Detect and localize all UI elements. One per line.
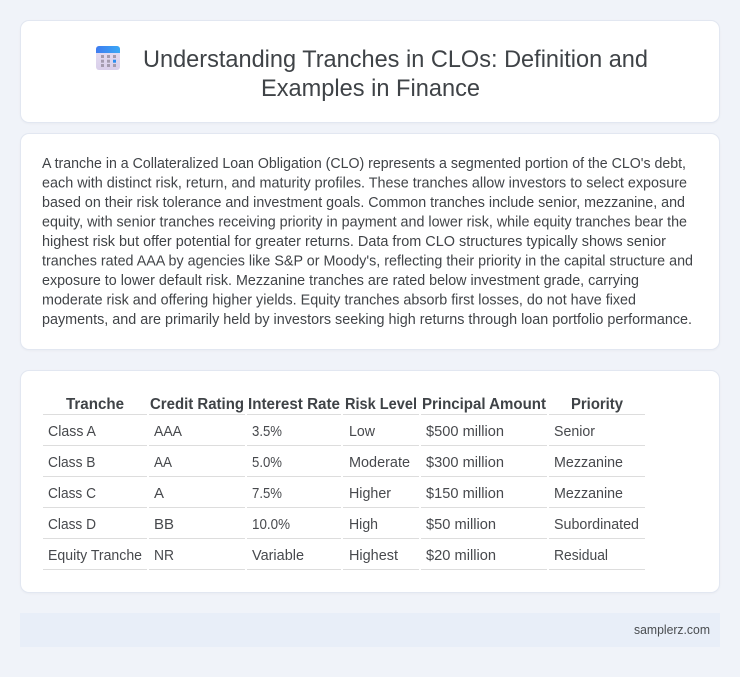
row: Class A (48, 424, 595, 440)
row: Class B: Mezzanine (554, 455, 623, 471)
row: Class A: $500 million (426, 424, 504, 440)
row: Class B: 5.0% (252, 455, 282, 471)
text block: description: payments, and are primarily held by investors seeking high returns through loan portfolio performance. (42, 312, 692, 328)
text block: description: based on their risk tolerance and investment goals. Common tranches include senior, mezzanine, and (42, 195, 685, 211)
row: Class C: 7.5% (252, 486, 282, 502)
row: Class B: Class B (48, 455, 96, 471)
table header: Credit Rating (150, 396, 244, 413)
table header: Tranche (66, 396, 124, 413)
row: Class B: Moderate (349, 455, 410, 471)
row: Class A: AAA (154, 424, 182, 440)
row: Class B: $300 million (426, 455, 504, 471)
text block: description: A tranche in a Collateralized Loan Obligation (CLO) represents a segmented portion of the CLO's debt, (42, 156, 686, 172)
text block: description: each with distinct risk, return, and maturity profiles. These tranches allow investors to select exposure (42, 176, 687, 192)
row: Class A: Class A (48, 424, 96, 440)
row: Equity Tranche: NR (154, 548, 174, 564)
title: Examples in Finance (261, 75, 480, 102)
row: Class A: 3.5% (252, 424, 282, 440)
text block: description: exposure to lower default risk. Mezzanine tranches are rated below investment grade, carrying (42, 273, 639, 289)
row: Equity Tranche: Residual (554, 548, 608, 564)
row: Equity Tranche: Highest (349, 548, 398, 564)
table header: Priority (571, 396, 623, 413)
table (43, 396, 645, 570)
row: Class C: Class C (48, 486, 96, 502)
row: Equity Tranche (48, 548, 608, 564)
panel: title card (20, 20, 720, 123)
footer text: samplerz.com (634, 623, 710, 637)
row: Class D: $50 million (426, 517, 496, 533)
table header: Principal Amount (422, 396, 547, 413)
text block: description: moderate risk and offering higher yields. Equity tranches absorb first losses, do not have fixed (42, 292, 636, 308)
panel: table card (20, 370, 720, 593)
row: Class C (48, 486, 623, 502)
row: Class B: AA (154, 455, 172, 471)
row: Class D: 10.0% (252, 517, 290, 533)
row: Class D (48, 517, 639, 533)
text block: description: equity, with senior tranches receiving priority in payment and lower risk, while equity tranches bear the (42, 214, 687, 230)
icon: calendar (96, 46, 120, 70)
row: Class D: Class D (48, 517, 96, 533)
title: Understanding Tranches in CLOs: Definition and (143, 46, 648, 73)
row: Class D: Subordinated (554, 517, 639, 533)
row: Equity Tranche: $20 million (426, 548, 496, 564)
footer bar (20, 613, 720, 647)
table header: Interest Rate (248, 396, 340, 413)
text block: description: tranches rated AAA by agencies like S&P or Moody's, reflecting their priority in the capital structure and (42, 254, 693, 270)
row: Class B (48, 455, 623, 471)
row: Class C: $150 million (426, 486, 504, 502)
panel: description card (20, 133, 720, 350)
title (143, 46, 648, 102)
row: Class C: Higher (349, 486, 391, 502)
row: Equity Tranche: Variable (252, 548, 304, 564)
text block: description (42, 156, 693, 328)
text block: description: highest risk but offer potential for greater returns. Data from CLO structures typically shows senior (42, 234, 666, 250)
table header: Risk Level (345, 396, 417, 413)
row: Class A: Low (349, 424, 376, 440)
row: Class C: Mezzanine (554, 486, 623, 502)
row: Class A: Senior (554, 424, 595, 440)
row: Class C: A (154, 486, 164, 502)
row: Class D: BB (154, 517, 174, 533)
row: Class D: High (349, 517, 378, 533)
row: Equity Tranche: Equity Tranche (48, 548, 142, 564)
table header (66, 396, 623, 413)
